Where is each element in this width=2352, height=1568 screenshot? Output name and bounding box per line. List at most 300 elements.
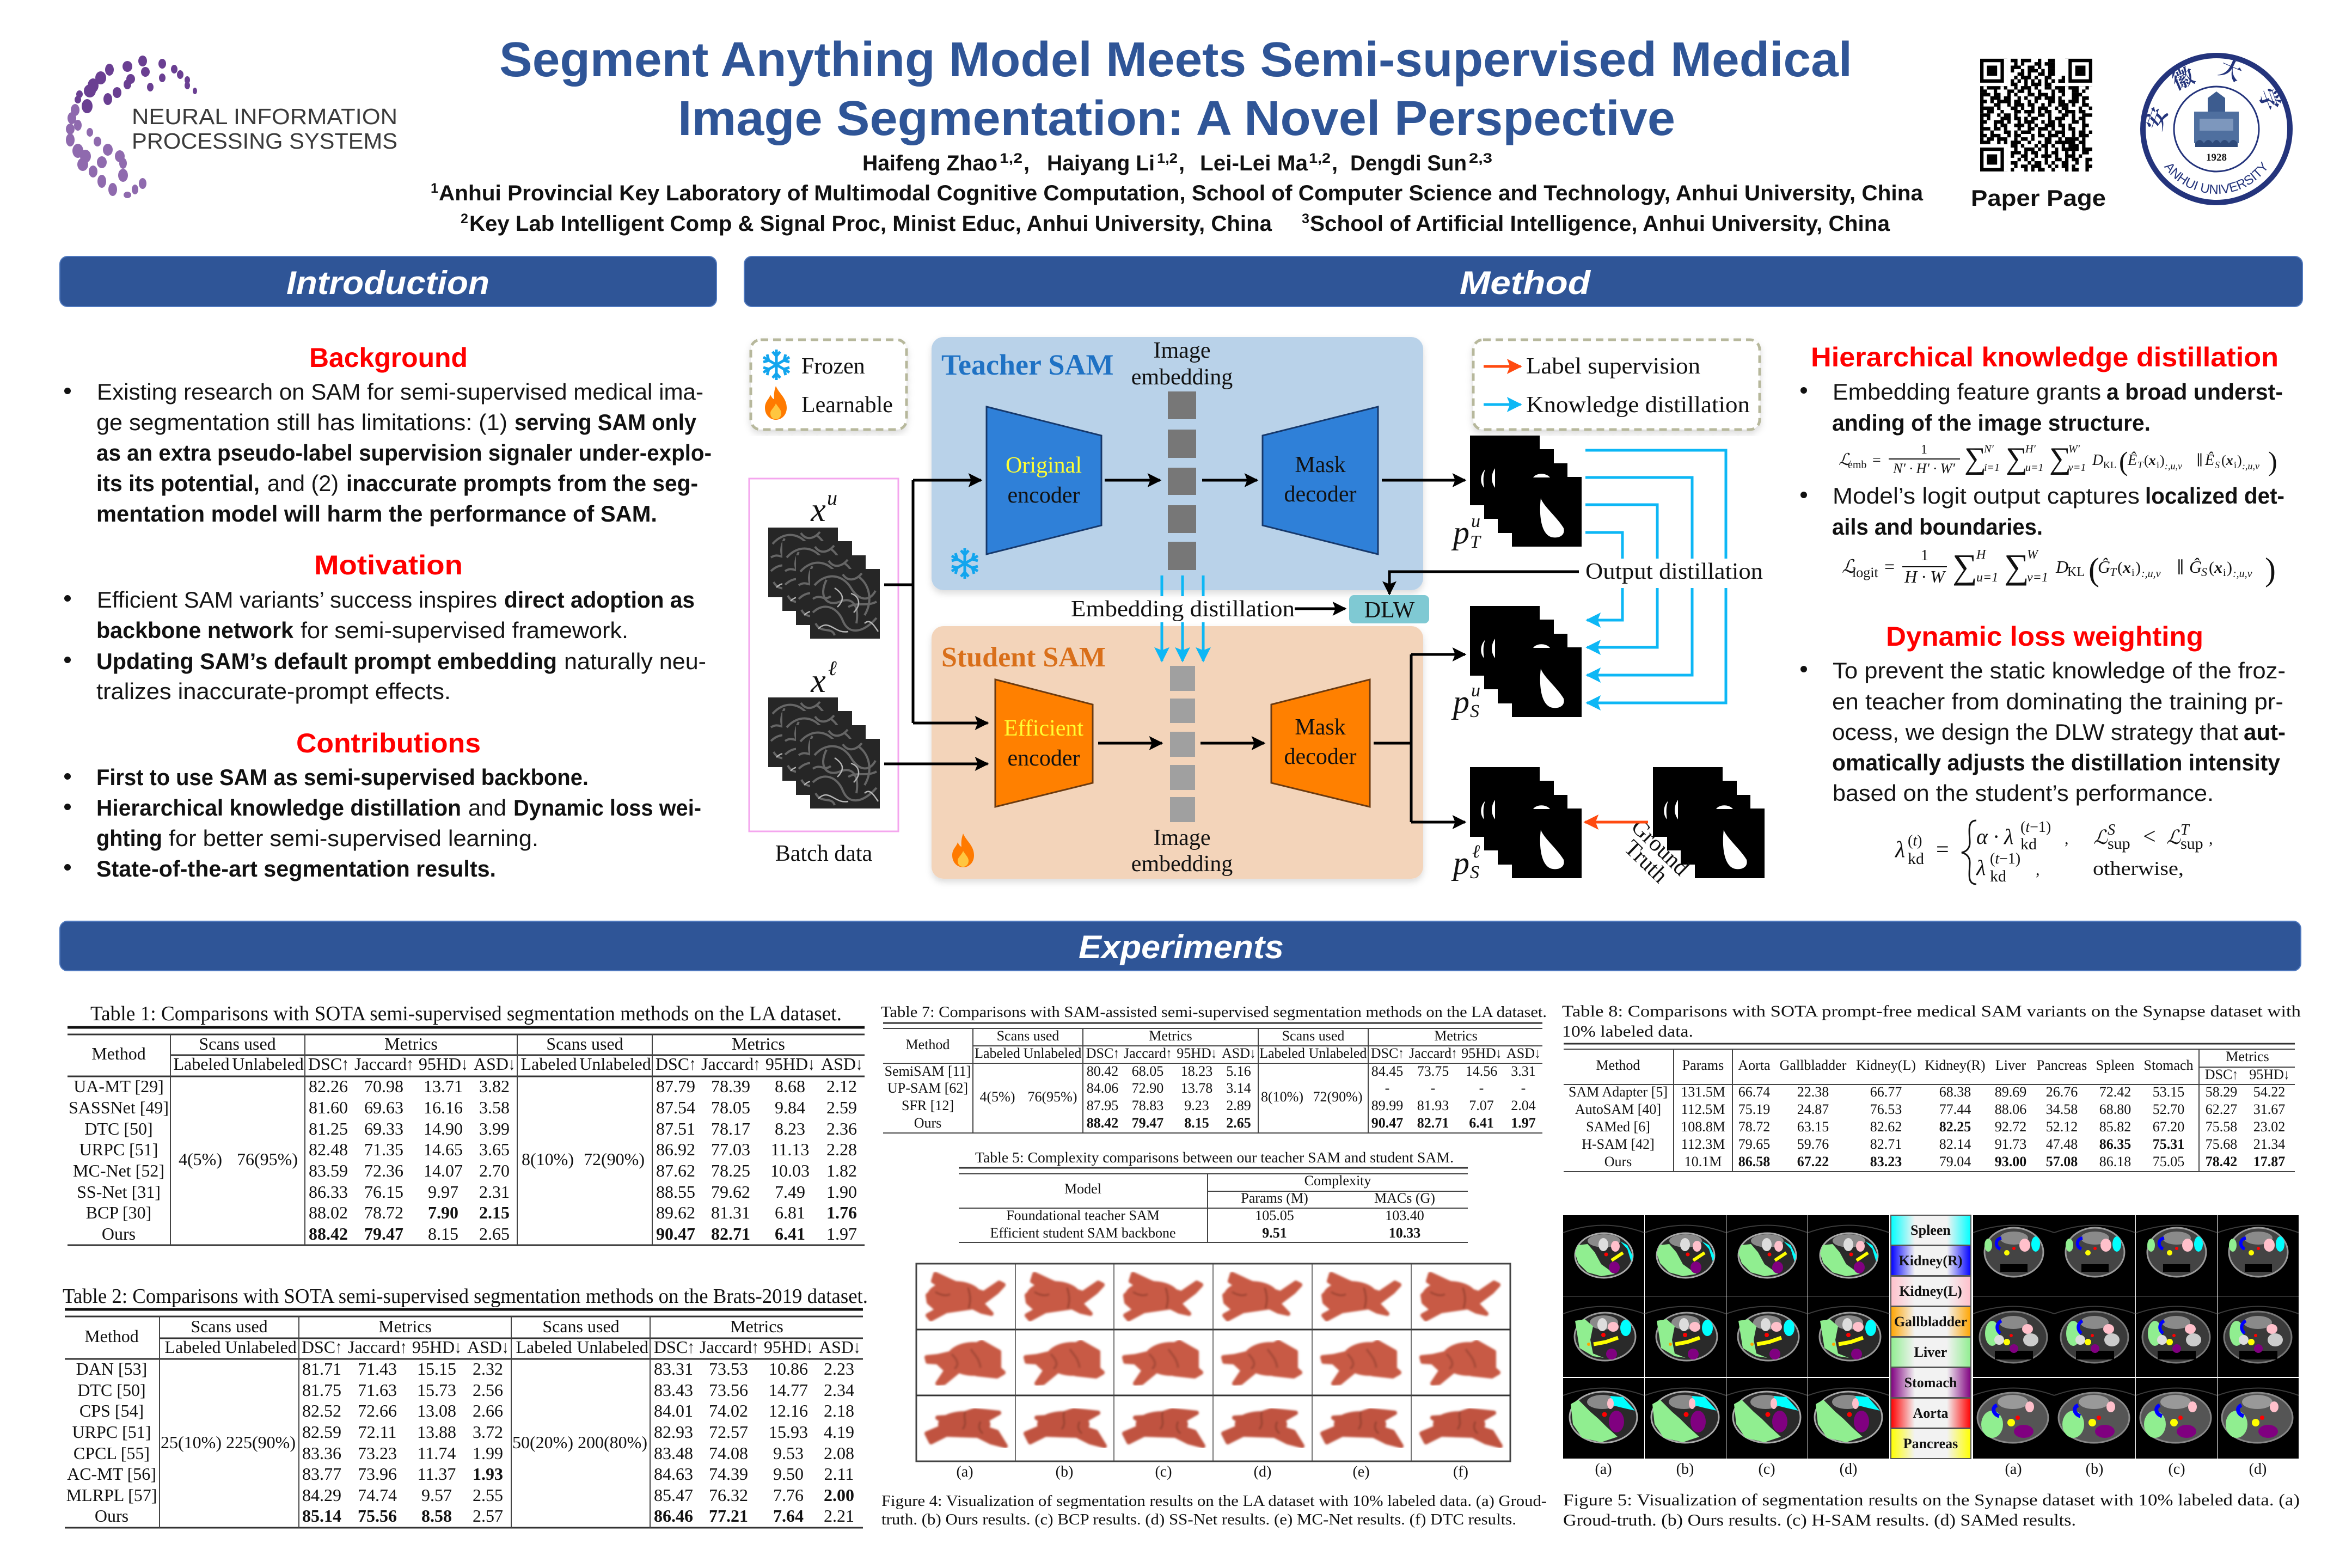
table 7: SAM-assisted comparison: 87.95 (1087, 1098, 1118, 1113)
table 2: Brats-2019 comparison: DAN [53] (76, 1359, 147, 1379)
authors: Dengdi Sun (1350, 151, 1467, 175)
text block: background bullet: as an extra pseudo-label supervision signaler under-explo- (96, 440, 712, 465)
table 2: Brats-2019 comparison: 73.53 (709, 1359, 748, 1379)
table 1: LA dataset comparison: 2.12 (826, 1076, 857, 1096)
table 8: prompt-free SAM comparison: 85.82 (2099, 1119, 2131, 1135)
table 2: Brats-2019 comparison: 12.16 (769, 1401, 808, 1420)
table 8: prompt-free SAM comparison: SAMed [6] (1586, 1119, 1650, 1135)
table 1: LA dataset comparison: 90.47 (656, 1224, 695, 1244)
table 2: Brats-2019 comparison: 74.74 (358, 1485, 397, 1505)
panel: teacher SAM: embedding (1131, 365, 1233, 390)
table 1: LA dataset comparison (68, 1002, 865, 1245)
formula: embedding loss: ∑ (2006, 442, 2028, 475)
table 7: SAM-assisted comparison: Ours (914, 1115, 941, 1131)
table 1: LA dataset comparison: Ours (102, 1224, 136, 1244)
table 1: LA dataset comparison: 72(90%) (584, 1149, 645, 1169)
table 5: complexity comparison: Table 5: Complexity comparisons between our teacher SAM and student SAM. (975, 1149, 1454, 1166)
formula: dynamic weight: < (2143, 824, 2156, 849)
table 2: Brats-2019 comparison: 81.71 (302, 1359, 341, 1379)
table 2: Brats-2019 comparison: Labeled (516, 1337, 572, 1357)
table 2: Brats-2019 comparison: 9.57 (421, 1485, 452, 1505)
formula: embedding loss: ∑ (1964, 442, 1986, 475)
figure 5: Synapse segmentation visualization: (c) (2168, 1461, 2185, 1478)
table 2: Brats-2019 comparison: 81.75 (302, 1380, 341, 1400)
table 8: prompt-free SAM comparison: H-SAM [42] (1582, 1136, 1655, 1152)
formula: logit loss: S (2201, 565, 2207, 579)
formula: embedding loss: i (2157, 460, 2159, 470)
legend: organ colours: Pancreas (1903, 1436, 1958, 1451)
table 2: Brats-2019 comparison: 95HD↓ (764, 1337, 815, 1357)
table 2: Brats-2019 comparison: Metrics (378, 1316, 432, 1336)
table 1: LA dataset comparison: 2.36 (826, 1119, 857, 1138)
authors: 1,2 (1000, 151, 1022, 166)
formula: dynamic weight: ℒ (2166, 826, 2181, 848)
mask stack: teacher prediction: T (1470, 532, 1481, 552)
table 2: Brats-2019 comparison: 95HD↓ (412, 1337, 463, 1357)
table 8: prompt-free SAM comparison: 67.22 (1797, 1154, 1829, 1169)
authors (862, 151, 1492, 175)
table 7: SAM-assisted comparison: Jaccard↑ (1409, 1045, 1459, 1061)
table 1: LA dataset comparison: 2.59 (826, 1098, 857, 1117)
table 7: SAM-assisted comparison: 6.41 (1469, 1115, 1494, 1131)
table 8: prompt-free SAM comparison: 59.76 (1797, 1136, 1829, 1152)
table 7: SAM-assisted comparison: Labeled (1259, 1045, 1305, 1061)
formula: embedding loss: 1 (1921, 443, 1927, 457)
table 2: Brats-2019 comparison: 73.23 (358, 1443, 397, 1463)
panel: student SAM: Student SAM (941, 642, 1106, 673)
affiliations: 1 (431, 181, 438, 196)
title: Image Segmentation: A Novel Perspective (678, 91, 1675, 146)
table 2: Brats-2019 comparison: MLRPL [57] (66, 1485, 157, 1505)
formula: logit loss: T (2110, 565, 2117, 579)
table 1: LA dataset comparison: 87.54 (656, 1098, 695, 1117)
table 8: prompt-free SAM comparison: 75.68 (2206, 1136, 2237, 1152)
table 7: SAM-assisted comparison: 73.75 (1417, 1063, 1449, 1079)
caption: figure 5: Figure 5: Visualization of segmentation results on the Synapse dataset with 10% labeled data. (a) (1563, 1490, 2300, 1509)
table 1: LA dataset comparison: 81.31 (711, 1203, 750, 1222)
formula: logit loss: H · W (1904, 567, 1946, 586)
table 2: Brats-2019 comparison: Scans used (542, 1316, 620, 1336)
table 2: Brats-2019 comparison: ASD↓ (467, 1337, 511, 1357)
text block: dynamic loss bullet: ocess, we design the DLW strategy that (1832, 719, 2238, 745)
table 7: SAM-assisted comparison: Metrics (1149, 1028, 1192, 1044)
panel: student SAM: Mask (1295, 715, 1346, 740)
formula: dynamic weight: λ (1894, 837, 1905, 862)
table 1: LA dataset comparison: 3.99 (479, 1119, 510, 1138)
table 1: LA dataset comparison: 7.49 (775, 1182, 805, 1202)
table 2: Brats-2019 comparison: 84.01 (654, 1401, 693, 1420)
title (499, 33, 1852, 146)
formula: logit loss: ℒ (1842, 557, 1856, 577)
table 7: SAM-assisted comparison: 4(5%) (980, 1089, 1015, 1105)
table 7: SAM-assisted comparison: 88.42 (1087, 1115, 1118, 1131)
panel: batch data: ℓ (828, 657, 837, 680)
figure 5: Synapse segmentation visualization: (d) (1840, 1461, 1857, 1478)
formula: dynamic weight: α · λ (1976, 824, 2013, 849)
table 1: LA dataset comparison: 1.90 (826, 1182, 857, 1202)
label: output distillation: Output distillation (1585, 559, 1763, 584)
table 7: SAM-assisted comparison: - (1521, 1080, 1526, 1096)
table 2: Brats-2019 comparison: URPC [51] (72, 1422, 151, 1442)
arrows: black data flow (884, 480, 1579, 822)
table 8: prompt-free SAM comparison: 26.76 (2046, 1084, 2078, 1100)
table 1: LA dataset comparison: 8.23 (775, 1119, 805, 1138)
table 2: Brats-2019 comparison: Ours (95, 1506, 128, 1526)
table 8: prompt-free SAM comparison: 75.31 (2153, 1136, 2184, 1152)
table 2: Brats-2019 comparison: Unlabeled (225, 1337, 297, 1357)
figure 5: Synapse segmentation visualization: (c) (1758, 1461, 1775, 1478)
panel: teacher SAM (932, 337, 1423, 590)
table 2: Brats-2019 comparison: Jaccard↑ (348, 1337, 409, 1357)
table 2: Brats-2019 comparison: 15.73 (417, 1380, 456, 1400)
table 8: prompt-free SAM comparison: 75.58 (2206, 1119, 2237, 1135)
table 1: LA dataset comparison: Scans used (199, 1034, 276, 1054)
table 7: SAM-assisted comparison: Table 7: Comparisons with SAM-assisted semi-supervised segmentation methods on the LA dataset. (881, 1003, 1547, 1021)
table 1: LA dataset comparison: 72.36 (364, 1161, 403, 1180)
text block: background bullet: mentation model will harm the performance of SAM. (96, 501, 657, 526)
table 8: prompt-free SAM comparison: 17.87 (2253, 1154, 2285, 1169)
legend: organ colours: Liver (1914, 1344, 1947, 1360)
formula: logit loss: ∑ (1952, 547, 1977, 586)
formula: dynamic weight: S (2108, 822, 2115, 838)
table 8: prompt-free SAM comparison: 78.72 (1738, 1119, 1770, 1135)
table 1: LA dataset comparison: 81.25 (309, 1119, 348, 1138)
box: DLW: DLW (1364, 598, 1415, 623)
formula: embedding loss: (x (2144, 452, 2156, 468)
table 8: prompt-free SAM comparison: 68.80 (2099, 1101, 2131, 1117)
authors: Haifeng Zhao (862, 151, 997, 175)
mask stack: ground truth: Truth (1619, 835, 1673, 888)
table 2: Brats-2019 comparison: DTC [50] (77, 1380, 146, 1400)
table 1: LA dataset comparison: 1.82 (826, 1161, 857, 1180)
affiliations: 2 (461, 211, 468, 226)
legend: organ colours: Spleen (1910, 1222, 1951, 1238)
table 8: prompt-free SAM comparison: Stomach (2144, 1057, 2193, 1073)
panel: teacher SAM: decoder (1284, 482, 1356, 507)
table 8: prompt-free SAM comparison: 92.72 (1995, 1119, 2026, 1135)
formula: embedding loss (1839, 442, 2277, 476)
caption: figure 5: Groud-truth. (b) Ours results. (c) H-SAM results. (d) SAMed results. (1563, 1510, 2076, 1529)
table 7: SAM-assisted comparison: 18.23 (1181, 1063, 1212, 1079)
table 5: complexity comparison: 10.33 (1389, 1225, 1420, 1241)
text block: dynamic loss bullet: To prevent the static knowledge of the froz- (1833, 658, 2286, 683)
figure 5: Synapse segmentation visualization: (a) (1595, 1461, 1612, 1478)
legend: organ colours: Aorta (1913, 1405, 1948, 1421)
logo: Anhui University seal: ANHUI UNIVERSITY (2164, 161, 2267, 194)
table 2: Brats-2019 comparison: 7.64 (773, 1506, 804, 1526)
caption: figure 5 (1563, 1490, 2300, 1529)
formula: dynamic weight: kd (1990, 867, 2006, 885)
table 1: LA dataset comparison: 1.97 (826, 1224, 857, 1244)
table 8: prompt-free SAM comparison: 88.06 (1995, 1101, 2026, 1117)
table 1: LA dataset comparison: 69.33 (364, 1119, 403, 1138)
table 1: LA dataset comparison: SASSNet [49] (69, 1098, 169, 1117)
table 8: prompt-free SAM comparison: 76.53 (1870, 1101, 1902, 1117)
section header: Experiments: Experiments (1079, 929, 1284, 965)
table 8: prompt-free SAM comparison: 54.22 (2253, 1084, 2285, 1100)
formula: embedding loss: = (1872, 452, 1881, 469)
text block: knowledge bullet one: Embedding feature grants (1833, 379, 2101, 405)
authors: Lei-Lei Ma (1200, 151, 1308, 175)
formula: logit loss: ( (2088, 552, 2099, 587)
table 2: Brats-2019 comparison: 86.46 (654, 1506, 693, 1526)
table 2: Brats-2019 comparison: 83.48 (654, 1443, 693, 1463)
table 1: LA dataset comparison: 2.28 (826, 1140, 857, 1159)
table 2: Brats-2019 comparison: CPS [54] (79, 1401, 144, 1420)
table 1: LA dataset comparison: Scans used (546, 1034, 623, 1054)
heading: Hierarchical knowledge distillation: Hierarchical knowledge distillation (1811, 342, 2278, 372)
panel: student SAM: decoder (1284, 744, 1356, 769)
formula: logit loss: Ĝ (2189, 557, 2202, 577)
table 2: Brats-2019 comparison: 71.63 (358, 1380, 397, 1400)
QR code (1980, 59, 2092, 171)
caption: figure 4: truth. (b) Ours results. (c) BCP results. (d) SS-Net results. (e) MC-Net results. (f) DTC results. (881, 1511, 1516, 1528)
table 2: Brats-2019 comparison: 9.53 (773, 1443, 804, 1463)
table 8: prompt-free SAM comparison: 83.23 (1870, 1154, 1902, 1169)
text block: background bullet (64, 379, 712, 526)
mask stack: student unlabeled prediction: u (1471, 681, 1480, 701)
formula: dynamic weight: (t−1) (2020, 819, 2051, 836)
table 2: Brats-2019 comparison: Table 2: Comparisons with SOTA semi-supervised segmentation methods on the Brats-2019 dataset. (63, 1285, 868, 1308)
panel: student SAM (932, 626, 1423, 879)
affiliations: 3 (1302, 211, 1309, 226)
table 5: complexity comparison: MACs (G) (1374, 1190, 1435, 1206)
table 2: Brats-2019 comparison: 25(10%) (161, 1432, 222, 1452)
formula: dynamic weight: T (2180, 822, 2190, 838)
table 2: Brats-2019 comparison: 13.88 (417, 1422, 456, 1442)
table 2: Brats-2019 comparison: 75.56 (358, 1506, 397, 1526)
table 8: prompt-free SAM comparison: 77.44 (1939, 1101, 1971, 1117)
formula: dynamic weight: sup (2180, 835, 2203, 853)
table 5: complexity comparison: Efficient student SAM backbone (990, 1225, 1176, 1241)
table 2: Brats-2019 comparison: 9.50 (773, 1464, 804, 1484)
logo: NeurIPS (66, 56, 397, 198)
text block: contributions bullets: and (468, 795, 506, 820)
table 7: SAM-assisted comparison: 3.14 (1226, 1080, 1251, 1096)
formula: embedding loss: Ê (2204, 452, 2214, 469)
table 8: prompt-free SAM comparison: SAM Adapter [5] (1569, 1084, 1668, 1100)
panel: batch data (749, 479, 898, 831)
table 7: SAM-assisted comparison: 72.90 (1132, 1080, 1163, 1096)
table 2: Brats-2019 comparison: Labeled (164, 1337, 221, 1357)
panel: student SAM: Efficient (1004, 716, 1083, 741)
formula: logit loss: D (2055, 557, 2068, 577)
table 1: LA dataset comparison: 88.42 (309, 1224, 348, 1244)
panel: introduction text (64, 342, 712, 881)
table 2: Brats-2019 comparison: 74.39 (709, 1464, 748, 1484)
formula: logit loss: u=1 (1976, 571, 1998, 585)
formula: logit loss: 1 (1921, 547, 1928, 564)
table 1: LA dataset comparison: URPC [51] (79, 1140, 158, 1159)
text block: knowledge bullet two: Model’s logit output captures (1833, 483, 2140, 509)
formula: embedding loss: S (2215, 460, 2220, 470)
table 2: Brats-2019 comparison: 10.86 (769, 1359, 808, 1379)
text block: background bullet: inaccurate prompts from the seg- (346, 470, 698, 496)
text block: motivation bullets: tralizes inaccurate-prompt effects. (96, 678, 451, 704)
table 8: prompt-free SAM comparison: 91.73 (1995, 1136, 2026, 1152)
formula: logit loss: H (1976, 548, 1987, 562)
table 8: prompt-free SAM comparison: 57.08 (2046, 1154, 2078, 1169)
table 2: Brats-2019 comparison: 13.08 (417, 1401, 456, 1420)
table 7: SAM-assisted comparison: - (1385, 1080, 1389, 1096)
authors: Haiyang Li (1047, 151, 1155, 175)
table 7: SAM-assisted comparison: Jaccard↑ (1124, 1045, 1173, 1061)
table 7: SAM-assisted comparison: 2.65 (1226, 1115, 1251, 1131)
table 1: LA dataset comparison: Jaccard↑ (701, 1054, 762, 1074)
table 7: SAM-assisted comparison: - (1479, 1080, 1484, 1096)
table 8: prompt-free SAM comparison: 131.5M (1681, 1084, 1725, 1100)
table 2: Brats-2019 comparison: 7.76 (773, 1485, 804, 1505)
image grid: right CT slices (1973, 1215, 2299, 1459)
text block: contributions bullets: for better semi-supervised learning. (169, 825, 538, 851)
table 1: LA dataset comparison: Metrics (384, 1034, 438, 1054)
authors: 2,3 (1469, 151, 1492, 166)
table 7: SAM-assisted comparison: 2.89 (1226, 1098, 1251, 1113)
table 7: SAM-assisted comparison: 79.47 (1132, 1115, 1163, 1131)
table 8: prompt-free SAM comparison: 79.04 (1939, 1154, 1971, 1169)
text block: motivation bullets: naturally neu- (564, 648, 706, 674)
table 8: prompt-free SAM comparison: 22.38 (1797, 1084, 1829, 1100)
panel: student SAM: Image (1154, 825, 1210, 850)
text block: contributions bullets: State-of-the-art segmentation results. (96, 856, 496, 881)
table 2: Brats-2019 comparison: 2.08 (824, 1443, 854, 1463)
formula: embedding loss: ) (2237, 452, 2242, 468)
caption: figure 4: Figure 4: Visualization of segmentation results on the LA dataset with 10% labeled data. (a) Groud- (881, 1492, 1547, 1510)
table 2: Brats-2019 comparison: AC-MT [56] (67, 1464, 156, 1484)
table 8: prompt-free SAM comparison: 66.74 (1738, 1084, 1770, 1100)
formula: embedding loss: ∑ (2049, 442, 2071, 475)
section header: Introduction: Introduction (286, 265, 489, 301)
table 8: prompt-free SAM comparison: 31.67 (2253, 1101, 2285, 1117)
table 1: LA dataset comparison: Labeled (520, 1054, 577, 1074)
formula: dynamic weight: otherwise, (2093, 857, 2184, 879)
table 1: LA dataset comparison: 2.65 (479, 1224, 510, 1244)
table 1: LA dataset comparison: 2.15 (479, 1203, 510, 1222)
table 2: Brats-2019 comparison: 73.96 (358, 1464, 397, 1484)
table 2: Brats-2019 comparison: DSC↑ (654, 1337, 696, 1357)
table 7: SAM-assisted comparison: DSC↑ (1086, 1045, 1120, 1061)
table 2: Brats-2019 comparison: 76.32 (709, 1485, 748, 1505)
formula: embedding loss: Ê (2127, 452, 2137, 469)
formula: logit loss: v=1 (2027, 571, 2048, 585)
figure 5: Synapse segmentation visualization: (b) (2086, 1461, 2103, 1478)
table 2: Brats-2019 comparison: DSC↑ (302, 1337, 344, 1357)
table 7: SAM-assisted comparison: Labeled (975, 1045, 1020, 1061)
table 7: SAM-assisted comparison: Unlabeled (1024, 1045, 1081, 1061)
table 8: prompt-free SAM comparison: 82.14 (1939, 1136, 1971, 1152)
formula: embedding loss: ∥ (2196, 452, 2203, 468)
table 7: SAM-assisted comparison: Method (906, 1037, 950, 1052)
table 1: LA dataset comparison: 88.55 (656, 1182, 695, 1202)
table 2: Brats-2019 comparison: 2.18 (824, 1401, 854, 1420)
mask stack: teacher prediction (1451, 436, 1582, 552)
section header: Introduction (60, 256, 716, 307)
table 8: prompt-free SAM comparison: 75.19 (1738, 1101, 1770, 1117)
table 8: prompt-free SAM comparison: 79.65 (1738, 1136, 1770, 1152)
table 2: Brats-2019 comparison: 15.93 (769, 1422, 808, 1442)
figure 4: LA segmentation visualization: (b) (1056, 1463, 1073, 1480)
table 8: prompt-free SAM comparison: Kidney(R) (1925, 1057, 1986, 1073)
table 2: Brats-2019 comparison: 72.57 (709, 1422, 748, 1442)
text block: dynamic loss bullet: based on the student’s performance. (1833, 780, 2214, 806)
table 1: LA dataset comparison: 9.97 (428, 1182, 458, 1202)
text block: contributions bullets: ghting (96, 825, 162, 851)
text block: motivation bullets: Updating SAM’s default prompt embedding (96, 648, 557, 674)
table 1: LA dataset comparison: 14.65 (424, 1140, 463, 1159)
table 2: Brats-2019 comparison: 225(90%) (226, 1432, 296, 1452)
formula: logit loss: KL (2067, 565, 2085, 579)
table 2: Brats-2019 comparison: 74.08 (709, 1443, 748, 1463)
table 1: LA dataset comparison: 76(95%) (237, 1149, 298, 1169)
formula: logit loss: :,u,v (2141, 568, 2161, 580)
table 1: LA dataset comparison: 8.68 (775, 1076, 805, 1096)
heading: Motivation: Motivation (314, 550, 463, 580)
table 1: LA dataset comparison: 3.82 (479, 1076, 510, 1096)
formula: dynamic weight: (t) (1908, 832, 1922, 849)
table 8: prompt-free SAM comparison: 108.8M (1681, 1119, 1725, 1135)
legend: organ colours: Kidney(L) (1899, 1283, 1962, 1299)
affiliations: Anhui Provincial Key Laboratory of Multimodal Cognitive Computation, School of Computer Science and Technology, Anhui University, China (439, 181, 1924, 205)
table 5: complexity comparison: Model (1064, 1181, 1101, 1197)
image grid: left CT slices (1563, 1215, 1889, 1459)
panel: batch data: x (810, 492, 826, 529)
table 1: LA dataset comparison: Table 1: Comparisons with SOTA semi-supervised segmentation methods on the LA dataset. (90, 1002, 842, 1025)
text block: knowledge bullet two: localized det- (2145, 483, 2284, 509)
mask stack: ground truth: Ground (1626, 814, 1694, 881)
table 7: SAM-assisted comparison: 90.47 (1371, 1115, 1403, 1131)
panel: teacher SAM: Image (1154, 338, 1210, 363)
table 1: LA dataset comparison: MC-Net [52] (73, 1161, 164, 1180)
formula: dynamic weight: λ (1976, 855, 1986, 880)
table 8: prompt-free SAM comparison: 10% labeled data. (1562, 1022, 1693, 1040)
formula: embedding loss: :,u,v (2165, 461, 2182, 471)
table 5: complexity comparison: 9.51 (1262, 1225, 1287, 1241)
table 2: Brats-2019 comparison: 8.58 (421, 1506, 452, 1526)
formula: logit loss: (x (2117, 559, 2131, 577)
panel: student SAM: encoder (1008, 746, 1080, 771)
table 1: LA dataset comparison: DTC [50] (84, 1119, 153, 1138)
table 2: Brats-2019 comparison: 200(80%) (578, 1432, 647, 1452)
table 2: Brats-2019 comparison: 72.66 (358, 1401, 397, 1420)
table 1: LA dataset comparison: 69.63 (364, 1098, 403, 1117)
formula: embedding loss: ( (2119, 446, 2128, 476)
table 1: LA dataset comparison: 87.79 (656, 1076, 695, 1096)
figure 4: LA segmentation visualization: (f) (1453, 1463, 1468, 1480)
table 7: SAM-assisted comparison: 82.71 (1417, 1115, 1449, 1131)
formula: logit loss: ) (2265, 552, 2276, 587)
table 7: SAM-assisted comparison: 68.05 (1132, 1063, 1163, 1079)
table 2: Brats-2019 comparison: 2.11 (824, 1464, 854, 1484)
formula: embedding loss: emb (1848, 459, 1866, 471)
table 7: SAM-assisted comparison: Metrics (1434, 1028, 1478, 1044)
formula: embedding loss: KL (2103, 460, 2116, 470)
diagram: method architecture (749, 337, 1765, 888)
table 5: complexity comparison: Params (M) (1241, 1190, 1308, 1206)
formula: embedding loss: u=1 (2025, 462, 2044, 474)
table 1: LA dataset comparison: ASD↓ (474, 1054, 517, 1074)
formula: logit loss: = (1884, 557, 1895, 577)
table 1: LA dataset comparison: 89.62 (656, 1203, 695, 1222)
formula: embedding loss: D (2092, 452, 2103, 469)
table 5: complexity comparison: Complexity (1304, 1173, 1371, 1189)
table 2: Brats-2019 comparison: Metrics (730, 1316, 783, 1336)
table 2: Brats-2019 comparison: 73.56 (709, 1380, 748, 1400)
table 1: LA dataset comparison: 86.33 (309, 1182, 348, 1202)
figure 5: Synapse segmentation visualization: (d) (2249, 1461, 2267, 1478)
table 1: LA dataset comparison: Unlabeled (232, 1054, 304, 1074)
table 8: prompt-free SAM comparison: Liver (1995, 1057, 2026, 1073)
table 2: Brats-2019 comparison: 2.23 (824, 1359, 854, 1379)
